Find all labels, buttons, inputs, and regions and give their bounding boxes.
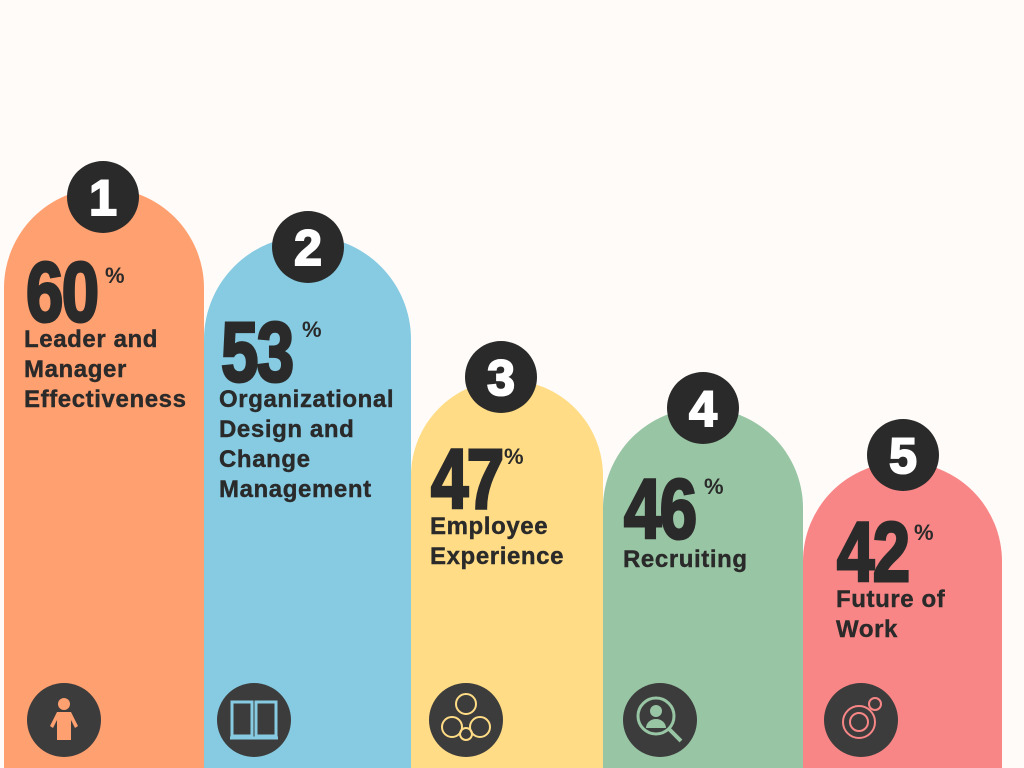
badge 3: 3 — [487, 350, 515, 406]
label 1: Effectiveness — [24, 386, 187, 413]
stat 2: 53 — [221, 305, 293, 399]
bar 3 yellow — [411, 380, 603, 768]
pct 5: % — [914, 520, 934, 545]
bar 2 blue — [204, 236, 411, 768]
icon: people experience — [429, 683, 503, 757]
label 5: Work — [836, 616, 898, 643]
label 2: Organizational — [219, 386, 394, 413]
label 1 — [24, 326, 187, 413]
bar 5 pink — [803, 462, 1002, 768]
badge 1 — [67, 161, 139, 233]
label 2: Design and — [219, 416, 354, 443]
icon: gear idea — [824, 683, 898, 757]
bar 4 green — [603, 408, 803, 768]
badge 1: 1 — [89, 170, 117, 226]
label 2: Change — [219, 446, 311, 473]
label 2: Management — [219, 476, 372, 503]
icon: search person — [623, 683, 697, 757]
label 1: Manager — [24, 356, 127, 383]
icon: person — [27, 683, 101, 757]
label 1: Leader and — [24, 326, 158, 353]
label 2 — [219, 386, 394, 503]
stat 3: 47 — [431, 432, 503, 526]
label 5 — [836, 586, 945, 643]
bar 1 orange — [4, 188, 204, 768]
label 4: Recruiting — [623, 546, 748, 573]
badge 5 — [867, 419, 939, 491]
badge 2 — [272, 211, 344, 283]
label 3 — [430, 513, 564, 570]
label 3: Experience — [430, 543, 564, 570]
badge 3 — [465, 341, 537, 413]
pct 3: % — [504, 444, 524, 469]
pct 1: % — [105, 263, 125, 288]
badge 2: 2 — [294, 220, 322, 276]
label 3: Employee — [430, 513, 548, 540]
badge 4 — [667, 372, 739, 444]
badge 4: 4 — [689, 381, 717, 437]
label 5: Future of — [836, 586, 945, 613]
stat 4: 46 — [624, 462, 696, 556]
stat 5: 42 — [837, 505, 909, 599]
pct 4: % — [704, 474, 724, 499]
badge 5: 5 — [889, 428, 917, 484]
icon: book — [217, 683, 291, 757]
stat 1: 60 — [26, 245, 98, 339]
pct 2: % — [302, 317, 322, 342]
